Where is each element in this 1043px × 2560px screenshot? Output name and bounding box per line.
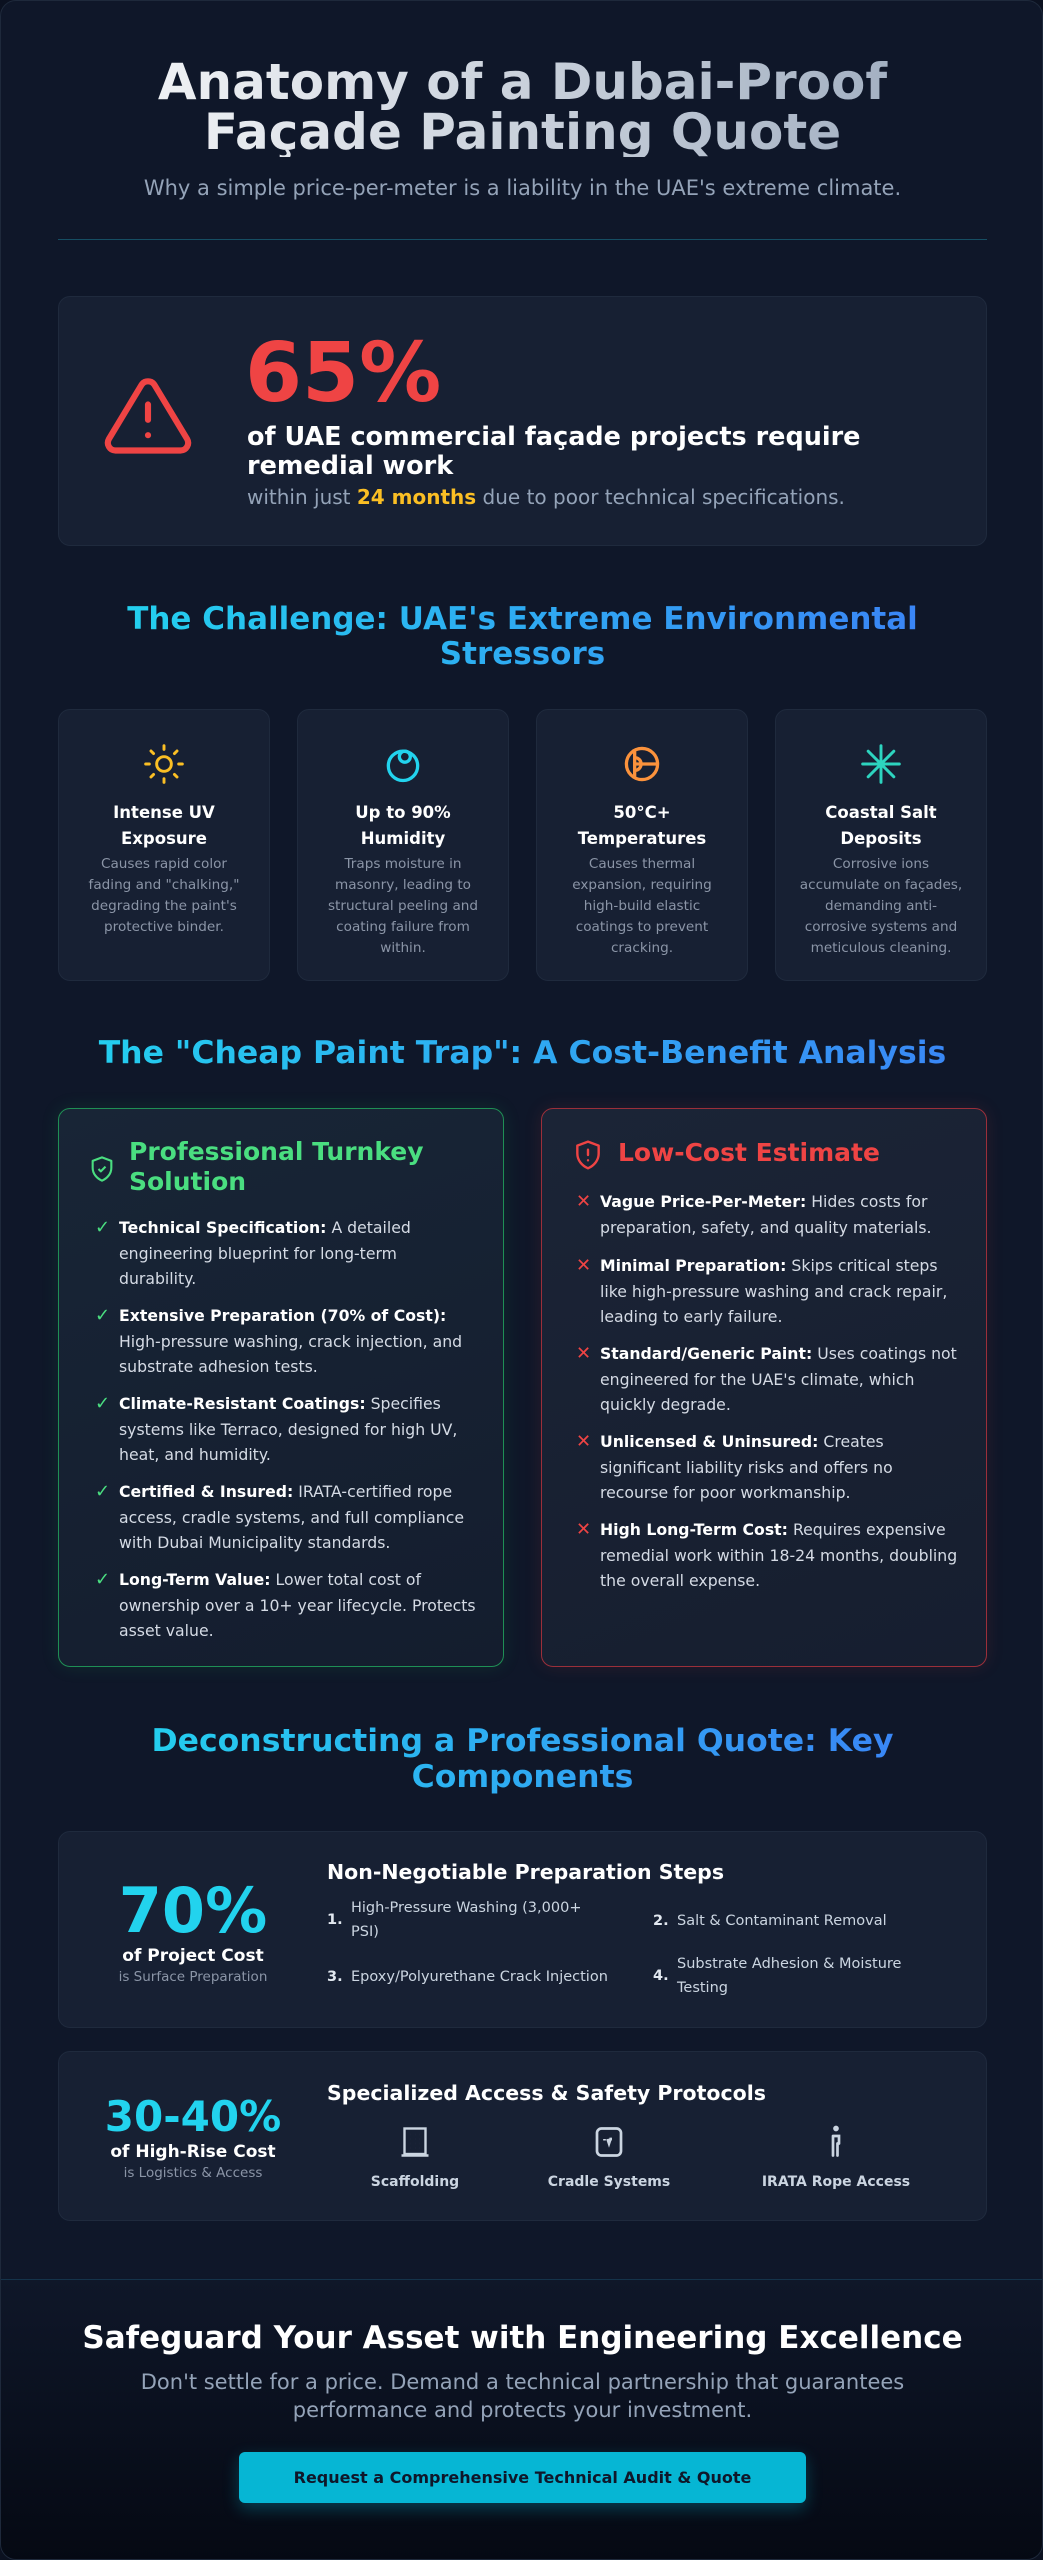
list: benefits: Extensive Preparation (70% of Cost): High-pressure washing, crack injection, and substrate adhesion tests. <box>119 1306 462 1376</box>
footer heading: Safeguard Your Asset with Engineering Excellence <box>82 2320 963 2356</box>
list: steps: 3. <box>327 1969 343 1985</box>
card: salt: corrosive systems and <box>805 919 957 935</box>
title: Anatomy of a Dubai-Proof <box>158 53 887 111</box>
card: temperature: high-build elastic <box>584 898 700 914</box>
card: UV <box>58 709 270 981</box>
card: temperature: Temperatures <box>578 829 706 848</box>
card: temperature: expansion, requiring <box>572 877 712 893</box>
card: humidity: coating failure from <box>336 919 470 935</box>
list: benefits: Long-Term Value: Lower total cost of ownership over a 10+ year lifecycle. Protects asset value. <box>119 1570 476 1640</box>
card: temperature: 50°C+ <box>613 803 671 822</box>
card: salt: Coastal Salt <box>825 803 937 822</box>
card: humidity: within. <box>380 940 426 956</box>
list: steps <box>327 1900 901 1996</box>
list: benefits: durability. <box>119 1269 196 1288</box>
list: benefits <box>95 1217 476 1640</box>
card: salt: meticulous cleaning. <box>811 940 951 956</box>
panel heading: Professional Turnkey <box>129 1137 424 1166</box>
panel: professional: ✓ <box>95 1569 110 1590</box>
icon: cradle: Cradle Systems <box>548 2174 670 2190</box>
heading: challenge: The Challenge: UAE's Extreme Environmental Stressors <box>127 601 918 672</box>
list: risks: Vague Price-Per-Meter: Hides costs for preparation, safety, and quality materials. <box>600 1192 932 1236</box>
card: humidity: masonry, leading to <box>335 877 471 893</box>
panel: low-cost: ✕ <box>576 1431 591 1452</box>
icon: sun <box>144 744 184 784</box>
panel: low-cost <box>541 1108 987 1667</box>
card: humidity: Up to 90% <box>355 803 451 822</box>
list: benefits: Certified & Insured: IRATA-certified rope access, cradle systems, and full compliance with Dubai Municipality standards. <box>119 1482 464 1552</box>
card: temperature <box>536 709 748 981</box>
list: steps: Substrate Adhesion & Moisture Testing <box>677 1956 901 1996</box>
card: UV: Causes rapid color <box>101 856 227 872</box>
list: steps: 4. <box>653 1968 669 1984</box>
list: risks: High Long-Term Cost: Requires expensive remedial work within 18-24 months, doubling the overall expense. <box>600 1520 957 1590</box>
subheading: Non-Negotiable Preparation Steps <box>327 1860 724 1884</box>
subtitle: Why a simple price-per-meter is a liability in the UAE's extreme climate. <box>144 176 901 200</box>
stat: 70%: is Surface Preparation <box>119 1969 267 1985</box>
card: humidity <box>297 709 509 981</box>
stat number: 65% <box>245 326 441 421</box>
card: temperature: Causes thermal <box>589 856 695 872</box>
panel heading: Solution <box>129 1167 246 1196</box>
stat text: of UAE commercial façade projects require remedial work <box>247 422 860 481</box>
stat: 30-40%: of High-Rise Cost <box>110 2142 276 2162</box>
list: risks <box>576 1191 957 1590</box>
title <box>1 57 1043 157</box>
card: UV: degrading the paint's <box>91 898 237 914</box>
button: CTA: Request a Comprehensive Technical Audit & Quote <box>294 2468 751 2487</box>
list: steps: 2. <box>653 1913 669 1929</box>
card: salt <box>775 709 987 981</box>
list: steps: High-Pressure Washing (3,000+ PSI) <box>351 1900 581 1940</box>
card: humidity: structural peeling and <box>328 898 478 914</box>
panel: professional: ✓ <box>95 1217 110 1238</box>
icon: shield alert <box>576 1140 600 1170</box>
icon: warning <box>104 378 192 454</box>
list: risks: Minimal Preparation: Skips critical steps like high-pressure washing and crack repair, leading to early failure. <box>600 1256 947 1326</box>
panel: low-cost: ✕ <box>576 1255 591 1276</box>
icon: scaffolding: Scaffolding <box>371 2174 459 2190</box>
heading: deconstructing: Deconstructing a Professional Quote: Key Components <box>151 1723 894 1795</box>
card: UV: protective binder. <box>104 919 224 935</box>
card: salt: Corrosive ions <box>833 856 929 872</box>
list: benefits: Climate-Resistant Coatings: Specifies systems like Terraco, designed for high UV, heat, and humidity. <box>119 1394 457 1464</box>
title: Façade Painting Quote <box>204 103 841 161</box>
card: salt: Deposits <box>840 829 922 848</box>
panel heading: Low-Cost Estimate <box>618 1138 880 1167</box>
stat: 70% <box>119 1874 267 1985</box>
list: steps: Salt & Contaminant Removal <box>677 1913 887 1929</box>
panel: low-cost: ✕ <box>576 1519 591 1540</box>
panel: professional <box>58 1108 504 1667</box>
footer <box>1 2279 1043 2560</box>
panel: low-cost: ✕ <box>576 1343 591 1364</box>
heading: cheap paint trap: The "Cheap Paint Trap": A Cost-Benefit Analysis <box>99 1035 946 1071</box>
card: temperature: cracking. <box>611 940 673 956</box>
card: humidity: Traps moisture in <box>344 856 462 872</box>
icon: salt <box>861 744 901 784</box>
list: steps: Epoxy/Polyurethane Crack Injection <box>351 1969 608 1985</box>
panel: professional: ✓ <box>95 1393 110 1414</box>
stat: 70%: 70% <box>119 1874 267 1947</box>
list: benefits: Technical Specification: A detailed engineering blueprint for long-term <box>119 1218 411 1262</box>
panel: access <box>58 2051 987 2221</box>
panel: preparation <box>58 1831 987 2028</box>
list: risks: Standard/Generic Paint: Uses coatings not engineered for the UAE's climate, which quickly degrade. <box>600 1344 957 1414</box>
card: UV: fading and "chalking," <box>89 877 239 893</box>
list: steps: 1. <box>327 1912 343 1928</box>
stat: 70%: of Project Cost <box>122 1946 264 1966</box>
stat subtext: within just 24 months due to poor technical specifications. <box>247 485 845 509</box>
card: UV: Exposure <box>121 829 207 848</box>
icon: scaffolding <box>371 2127 459 2190</box>
card: humidity: Humidity <box>361 829 445 848</box>
card: salt: accumulate on façades, <box>800 877 962 893</box>
subheading: Specialized Access & Safety Protocols <box>327 2081 766 2105</box>
card: salt: demanding anti- <box>825 898 937 914</box>
panel: professional: ✓ <box>95 1481 110 1502</box>
icon: thermal <box>624 746 660 782</box>
icon: shield check <box>92 1156 112 1182</box>
panel: professional: ✓ <box>95 1305 110 1326</box>
card: temperature: coatings to prevent <box>576 919 708 935</box>
stat: 30-40%: is Logistics & Access <box>124 2165 262 2181</box>
icon: cradle <box>548 2127 670 2190</box>
icon: drop <box>386 750 420 782</box>
stat: 30-40%: 30-40% <box>105 2092 281 2141</box>
button: CTA <box>239 2452 806 2503</box>
footer text: Don't settle for a price. Demand a technical partnership that guarantees performance and protects your investment. <box>141 2370 904 2422</box>
panel: low-cost: ✕ <box>576 1191 591 1212</box>
icon: rope access: IRATA Rope Access <box>762 2174 910 2190</box>
icon: rope access <box>762 2126 910 2190</box>
list: risks: Unlicensed & Uninsured: Creates significant liability risks and offers no recourse for poor workmanship. <box>600 1432 893 1502</box>
card: UV: Intense UV <box>113 803 215 822</box>
panel heading <box>129 1137 424 1196</box>
stat: 30-40% <box>105 2092 281 2181</box>
panel: 65% stat <box>58 296 987 546</box>
